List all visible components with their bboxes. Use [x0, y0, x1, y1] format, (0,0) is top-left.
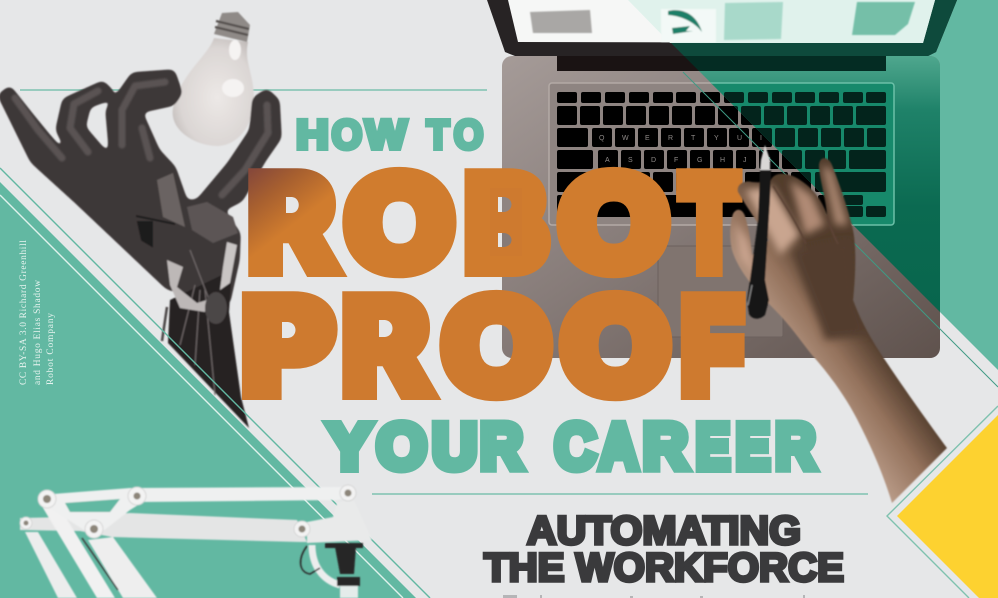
outer diagonal strut: [25, 532, 77, 598]
screen: [508, 0, 935, 43]
title: your career: R: [775, 410, 816, 482]
title: proof: F: [682, 274, 742, 418]
title: your career: C: [555, 410, 596, 482]
title: your career: E: [736, 410, 770, 482]
credit line two: and Hugo Elias Shadow: [33, 280, 43, 385]
yellow diamond: [897, 415, 998, 598]
hinge: [557, 56, 886, 71]
white tube: [312, 545, 340, 585]
title: robot: O: [561, 151, 667, 295]
subheading: automating the workforce: [484, 509, 844, 590]
pen: [747, 145, 771, 319]
steel wrist brackets: [167, 260, 207, 312]
keyboard well: [549, 83, 894, 225]
laptop photo: [487, 0, 998, 387]
bulb screw cap: [214, 12, 250, 42]
title letter counters: [274, 188, 522, 346]
camera gimbal: [325, 543, 363, 586]
teal triangle panel: [0, 182, 416, 598]
title: proof: O: [444, 274, 549, 418]
palm dark details: [136, 216, 175, 246]
screen thumbnails: [530, 2, 915, 43]
key legends: QWERTYUIOP: [599, 135, 811, 142]
title: how to: W: [365, 112, 407, 158]
hand and arm: [730, 158, 947, 503]
credit line one: CC BY-SA 3.0 Richard Greenhill: [19, 240, 29, 385]
robotic arm photo: [20, 485, 372, 598]
robot hand silhouette: [0, 70, 281, 305]
title: how to: T: [427, 112, 449, 158]
joints: [20, 485, 356, 538]
title: your career: O: [377, 410, 426, 482]
upper arm bar: [40, 487, 352, 537]
title: [243, 112, 816, 482]
light bulb: [173, 12, 254, 146]
cut-off body text: [503, 595, 805, 598]
hand shading: [735, 165, 868, 340]
subheading line two: THE WORKFORCE: [484, 546, 844, 590]
title: robot: T: [682, 151, 737, 295]
title: how to: O: [454, 112, 483, 158]
rule above subheading: [372, 493, 868, 495]
teal corner panel: top right: [628, 0, 998, 370]
end plate: [307, 498, 372, 543]
laptop body: [502, 56, 940, 358]
title: your career: A: [600, 410, 638, 482]
laptop screen bezel: [487, 0, 957, 56]
thin diagonal line: [683, 72, 998, 387]
title: robot: B: [466, 151, 548, 295]
title: proof: P: [243, 274, 332, 418]
palm plate: [157, 173, 185, 227]
title: your career: R: [480, 410, 523, 482]
robot forearm tendons: [168, 270, 249, 428]
title: your career: Y: [328, 410, 372, 482]
key legends row two: ASDFGHJK: [605, 157, 771, 164]
lower arm bar: [20, 513, 307, 542]
title: robot: O: [347, 151, 452, 295]
subheading line one: AUTOMATING: [527, 509, 801, 553]
title: proof: R: [344, 274, 427, 418]
title: how to: O: [332, 112, 362, 158]
human hand holding pen: [730, 145, 947, 503]
title: your career: R: [643, 410, 688, 482]
link cutout: [65, 499, 120, 512]
finger highlights: [15, 82, 268, 195]
cable: [301, 546, 320, 574]
wide diagonal strut: [88, 537, 157, 598]
title: robot: R: [250, 151, 333, 295]
long diagonal strut: [40, 503, 115, 598]
yellow diamond outline: [887, 406, 998, 598]
teal panel inner line: [0, 195, 403, 598]
trackpad: [658, 246, 783, 337]
title: how to: H: [296, 112, 329, 158]
top rule: [20, 89, 487, 91]
teal panel outer line: [0, 168, 430, 598]
keyboard keys: [557, 92, 886, 217]
thumb base: [187, 202, 238, 243]
title: proof: O: [563, 274, 668, 418]
title: your career: E: [696, 410, 730, 482]
credit line three: Robot Company: [46, 313, 56, 385]
robot hand holding light bulb: [0, 12, 281, 428]
green tinted half of laptop: [699, 56, 940, 312]
photo credit: [19, 240, 56, 385]
title: your career: U: [432, 410, 477, 482]
